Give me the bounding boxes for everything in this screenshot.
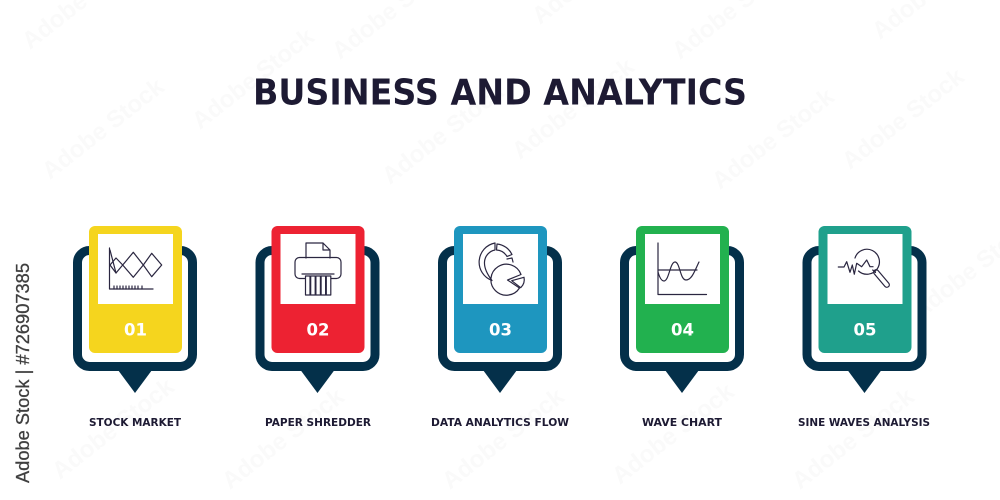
text: Adobe Stock [217,383,350,495]
text: Adobe Stock [47,373,180,485]
number: 01 [124,320,147,340]
panel: stock market [78,226,192,429]
text: Adobe Stock [837,63,970,175]
text: Adobe Stock [707,83,840,195]
text: Adobe Stock [377,78,510,190]
number: 03 [489,320,512,340]
text: Adobe Stock [187,23,320,135]
card [636,226,729,353]
icon box [828,234,902,304]
stock id text: Adobe Stock | #726907385 [13,263,33,483]
text: Adobe Stock [607,378,740,490]
icon: sine waves analysis [838,249,889,287]
icon: paper shredder [295,243,341,295]
icon box [280,234,356,304]
icon box [98,234,173,304]
card [272,226,364,353]
text: Adobe Stock [787,383,920,495]
pointer [118,370,152,393]
text: Adobe Stock [507,53,640,165]
pointer [300,370,334,393]
icon: data analytics flow [479,243,524,295]
icon box [463,234,538,304]
card [89,226,182,353]
pointer [665,370,699,393]
bracket frame [807,250,922,366]
icon box [645,234,720,304]
panel: sine waves analysis [798,226,930,429]
number: 05 [854,320,876,340]
number: 02 [307,320,329,340]
card [818,226,912,353]
bracket frame [442,250,558,366]
bracket frame [260,250,375,366]
text: Adobe Stock [437,383,570,495]
bracket frame [78,250,192,366]
pointer [848,370,882,393]
text: Adobe Stock [37,73,170,185]
panel: wave chart [624,226,740,429]
label: WAVE CHART [642,417,723,429]
icon: stock market [110,248,162,289]
number: 04 [671,320,694,340]
pointer [483,370,517,393]
title: BUSINESS AND ANALYTICS [253,72,747,114]
panel: paper shredder [260,226,375,429]
label: STOCK MARKET [89,417,182,429]
label: DATA ANALYTICS FLOW [431,417,569,429]
panel: data analytics flow [431,226,569,429]
icon: wave chart [658,243,706,294]
card [454,226,547,353]
label: PAPER SHREDDER [265,417,371,429]
label: SINE WAVES ANALYSIS [798,417,930,429]
bracket frame [624,250,740,366]
